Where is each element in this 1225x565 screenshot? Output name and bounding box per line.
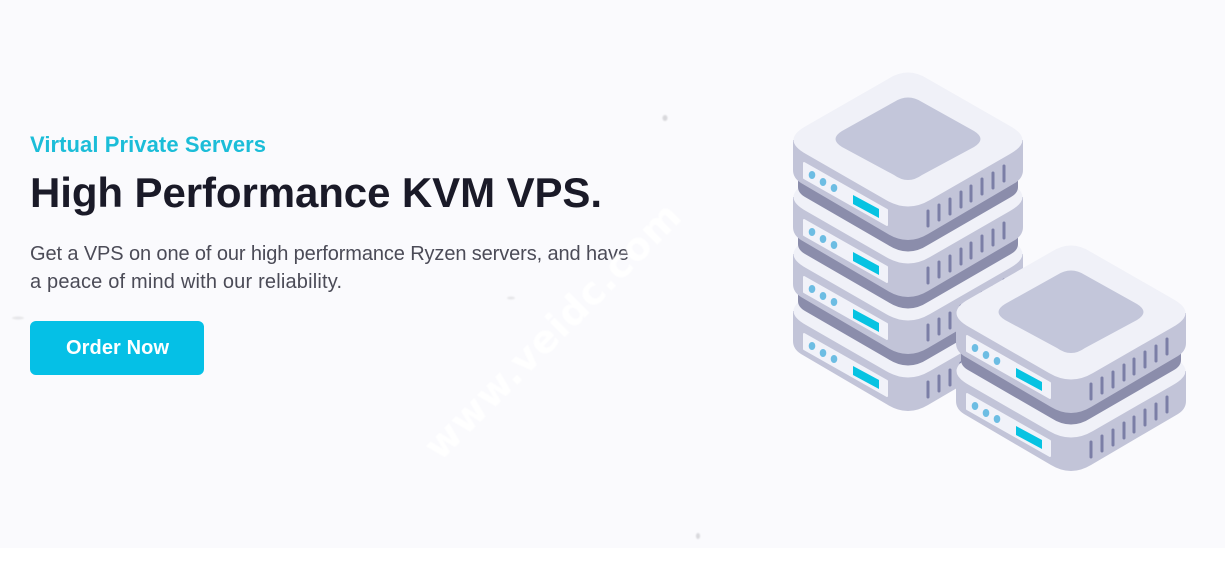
description text: a peace of mind with our reliability. (30, 271, 342, 293)
description text: Get a VPS on one of our high performance Ryzen servers, and have (30, 243, 629, 265)
heading: High Performance KVM VPS. (30, 169, 602, 216)
small stack unit 2 (956, 304, 1186, 471)
server unit 3 (793, 186, 1023, 366)
subtitle: Virtual Private Servers (30, 132, 266, 157)
button: order now (30, 321, 204, 375)
server unit 2 (793, 130, 1023, 308)
button: order now: Order Now (66, 337, 169, 359)
watermark: www.veidc.com (415, 194, 690, 468)
server unit 1 (793, 72, 1023, 252)
illustration: small server stack (956, 246, 1186, 471)
small stack unit 1 (956, 246, 1186, 424)
description text (30, 243, 629, 293)
illustration: main server stack (793, 72, 1023, 411)
server unit 4 (793, 244, 1023, 411)
